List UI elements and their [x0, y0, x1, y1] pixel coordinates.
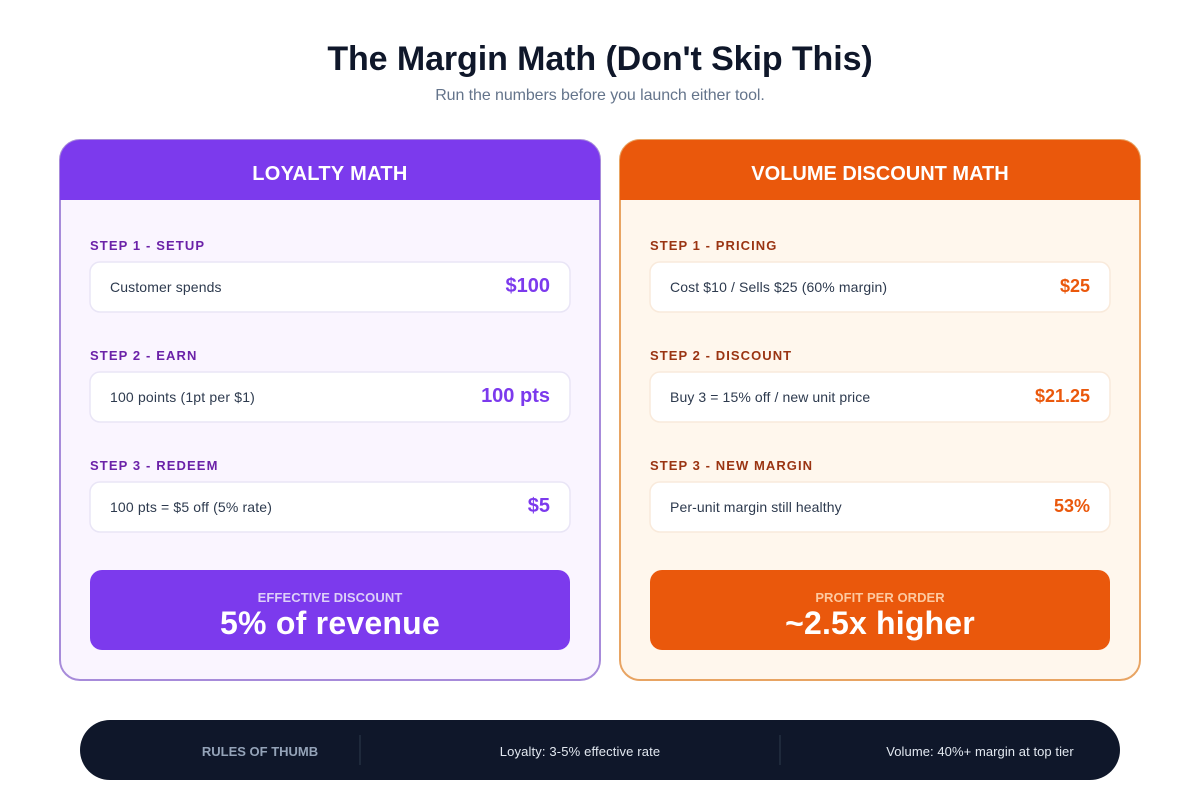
step 1 row: Customer spends — [110, 279, 222, 295]
result: profit per order: PROFIT PER ORDER — [815, 590, 945, 605]
result: effective discount: 5% of revenue — [220, 605, 440, 641]
step 3 heading: STEP 3 - REDEEM — [90, 458, 219, 473]
panel: loyalty math — [59, 139, 601, 681]
panel header: loyalty math: LOYALTY MATH — [252, 163, 408, 185]
step 2 row: 100 pts — [481, 385, 550, 407]
result: profit per order — [650, 570, 1110, 650]
step 2 heading: STEP 2 - EARN — [90, 348, 198, 363]
result: effective discount — [90, 570, 570, 650]
step 3 row: 53% — [1054, 496, 1090, 516]
step 3 row — [90, 482, 570, 532]
step 2 row: $21.25 — [1035, 386, 1090, 406]
panel header: volume discount math: VOLUME DISCOUNT MATH — [751, 163, 1009, 185]
step 3 row: 100 pts = $5 off (5% rate) — [110, 499, 272, 515]
step 1 heading: STEP 1 - SETUP — [90, 238, 205, 253]
step 1 row: $25 — [1060, 276, 1090, 296]
result: effective discount: EFFECTIVE DISCOUNT — [258, 590, 402, 605]
subtitle: Run the numbers before you launch either tool. — [435, 87, 765, 104]
step 3 heading: STEP 3 - NEW MARGIN — [650, 458, 813, 473]
step 3 row: Per-unit margin still healthy — [670, 499, 842, 515]
result: profit per order: ~2.5x higher — [785, 605, 975, 641]
step 1 row: Cost $10 / Sells $25 (60% margin) — [670, 279, 887, 295]
rule: loyalty: Loyalty: 3-5% effective rate — [500, 744, 660, 759]
panel header: volume discount math — [620, 140, 1140, 200]
step 1 row — [90, 262, 570, 312]
step 2 row: Buy 3 = 15% off / new unit price — [670, 389, 870, 405]
rules label: RULES OF THUMB — [202, 744, 318, 759]
title: The Margin Math (Don't Skip This) — [327, 40, 873, 78]
step 2 heading: STEP 2 - DISCOUNT — [650, 348, 792, 363]
rule: volume: Volume: 40%+ margin at top tier — [886, 744, 1074, 759]
step 1 row — [649, 261, 1111, 313]
step 2 row — [89, 372, 571, 422]
panel header: loyalty math — [60, 140, 600, 200]
step 2 row — [649, 371, 1111, 423]
panel: volume discount math — [619, 139, 1141, 681]
step 3 row: $5 — [528, 495, 550, 517]
step 3 row — [649, 481, 1111, 533]
step 1 heading: STEP 1 - PRICING — [650, 238, 777, 253]
step 2 row: 100 points (1pt per $1) — [110, 389, 255, 405]
rules of thumb bar — [80, 720, 1120, 780]
step 1 row: $100 — [506, 275, 550, 297]
